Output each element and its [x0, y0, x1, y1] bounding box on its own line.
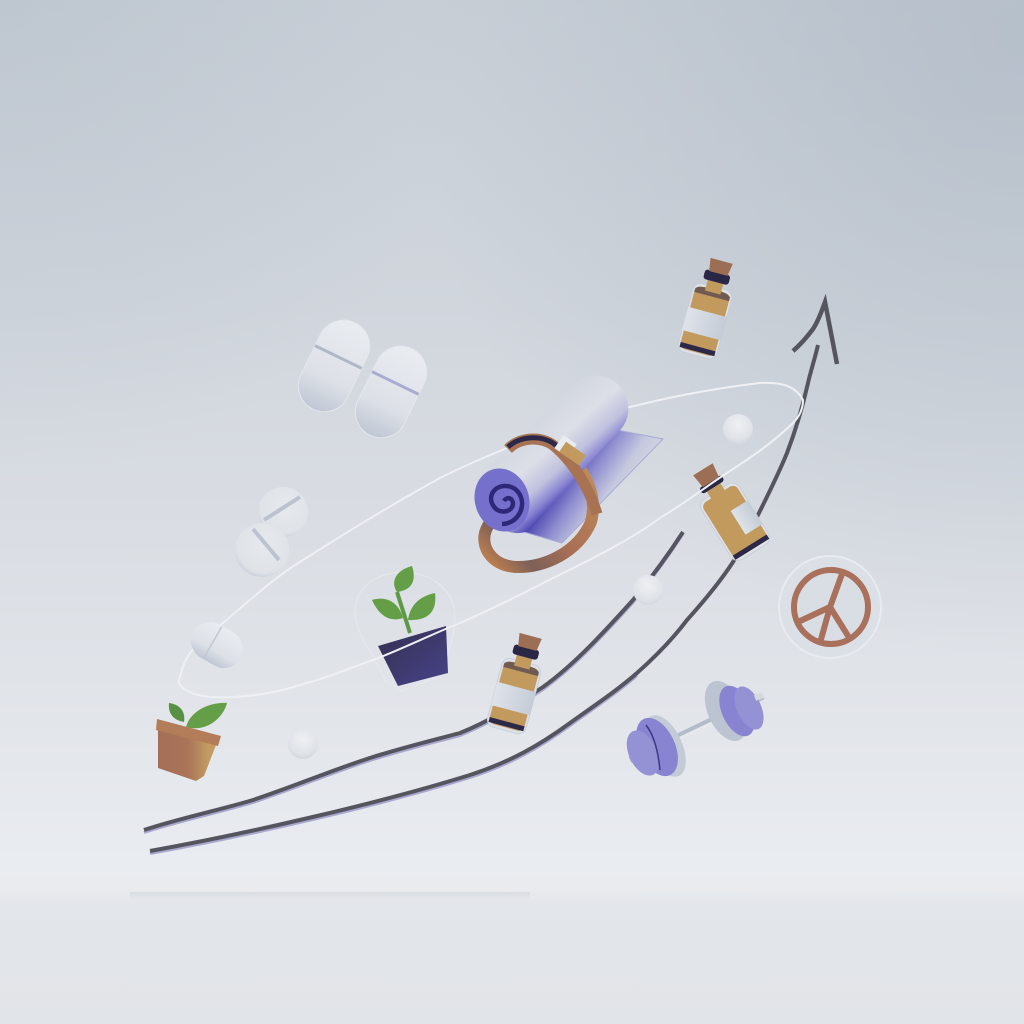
dark potted plant: [372, 566, 448, 686]
capsule pill two: [347, 337, 435, 447]
yoga mat: [466, 376, 663, 567]
growth curve: short line: [144, 532, 683, 832]
buckle: [554, 435, 588, 465]
sphere upper right: [723, 414, 753, 444]
mat cylinder: [478, 376, 628, 533]
terracotta potted plant: [156, 703, 227, 781]
sphere on curve: [633, 575, 663, 605]
peace symbol: [779, 556, 881, 658]
tablet back: [258, 487, 308, 537]
bottle right: [684, 458, 773, 564]
bottle top: [677, 256, 741, 361]
dumbbell: [620, 674, 770, 783]
growth arrow: long line: [150, 302, 837, 854]
glass ring orbit: [179, 383, 803, 697]
sphere lower left: [288, 729, 318, 759]
small capsule on ring: [184, 615, 250, 675]
belt over roll: [508, 439, 597, 514]
bottle center: [486, 631, 550, 736]
arrow head: [793, 302, 837, 364]
tablet front: [235, 523, 289, 577]
glass bubble around plant: [355, 572, 455, 691]
capsule pill one: [290, 311, 378, 421]
mat sheet: [517, 430, 663, 543]
spiral end: [466, 461, 538, 539]
belt lower loop: [484, 449, 593, 567]
